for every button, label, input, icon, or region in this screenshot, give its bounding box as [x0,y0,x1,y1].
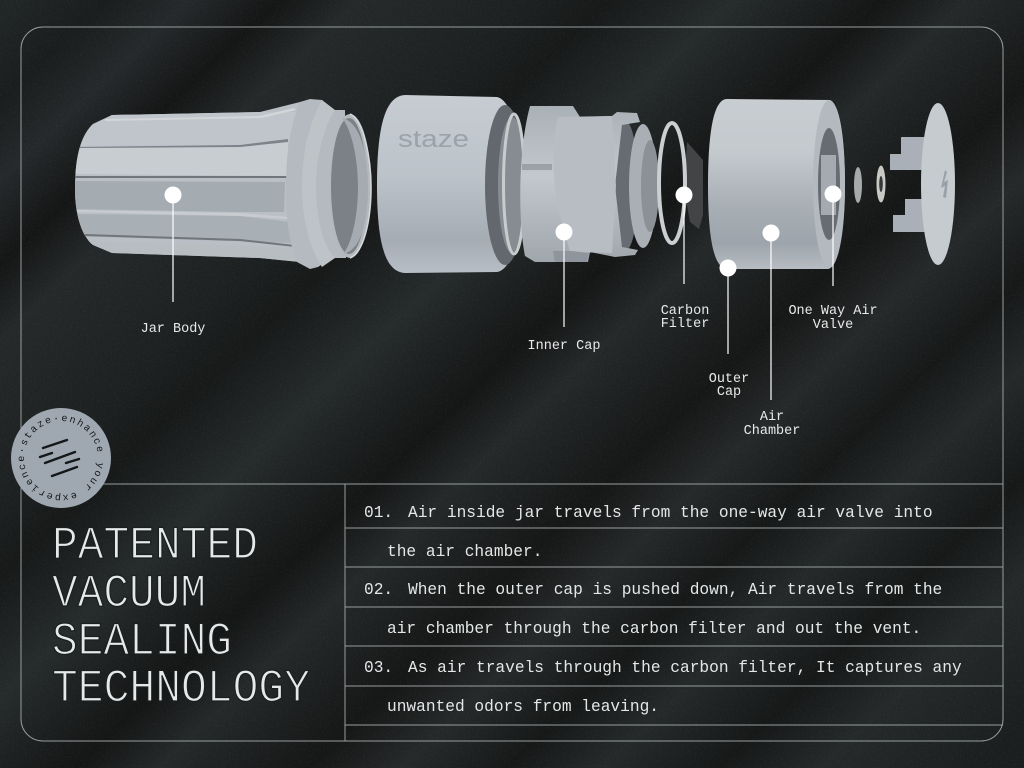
step 01: 01. [364,504,393,522]
callout: carbon filter: Carbon [661,304,709,319]
step 03: As air travels through the carbon filter, It captures any [408,659,962,677]
callout: air chamber: Chamber [744,424,800,439]
step 01: Air inside jar travels from the one-way air valve into [408,504,933,522]
callout: one way air valve: Valve [813,318,853,333]
step 01: the air chamber. [387,543,542,561]
callout: outer cap: Cap [717,385,741,400]
jar mouth [329,114,371,258]
callout: one way air valve: One Way Air [788,304,878,319]
callout: inner cap: Inner Cap [528,339,600,354]
callout: carbon filter [661,186,709,332]
jar body [70,99,371,270]
callout: inner cap [528,224,600,354]
step 02: 02. [364,581,393,599]
one way air valve parts [854,166,886,203]
callout: outer cap: Outer [709,372,749,387]
title: SEALING [52,616,232,668]
step 01 [364,504,933,561]
title: PATENTED [52,520,258,572]
jar collar [286,99,346,269]
staze logotype: staze [398,126,469,153]
callout: jar body [141,186,205,337]
callout: one way air valve [788,186,878,333]
step 02: When the outer cap is pushed down, Air travels from the [408,581,942,599]
title [52,520,310,715]
carbon filter [659,123,703,243]
callout: air chamber [744,224,800,439]
callout: air chamber: Air [760,410,784,425]
inner cap [520,106,659,262]
air chamber [708,99,845,269]
steps text [364,504,962,716]
step 02 [364,581,942,638]
callout: outer cap [709,260,749,400]
step 03: 03. [364,659,393,677]
badge: staze seal [11,408,111,508]
callout: jar body: Jar Body [141,322,205,337]
step 03 [364,659,962,716]
badge circular text: perience·staze·enhance your ex [18,416,104,500]
step 02: air chamber through the carbon filter and out the vent. [387,620,921,638]
title: VACUUM [52,568,206,620]
callout: carbon filter: Filter [661,317,709,332]
badge logo mark [40,440,79,476]
title: TECHNOLOGY [52,663,310,715]
outer cap [377,95,526,273]
step 03: unwanted odors from leaving. [387,698,659,716]
end disc with pegs [890,103,955,265]
